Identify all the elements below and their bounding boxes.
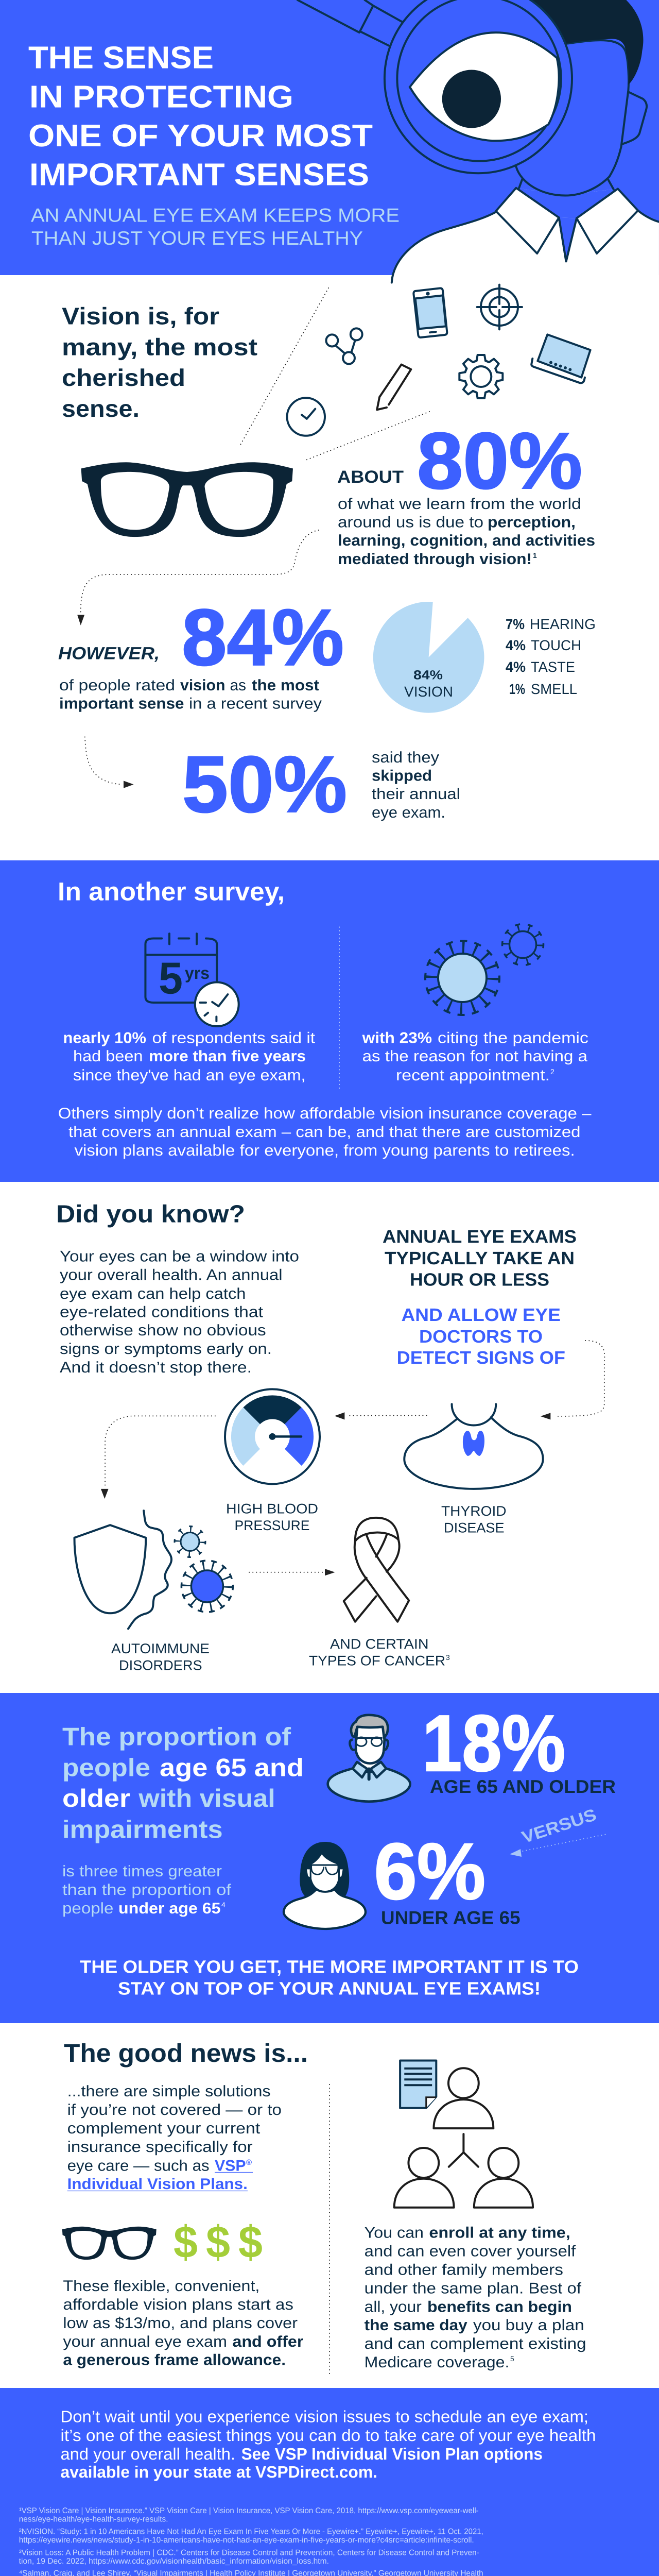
legend: other senses: TOUCH — [531, 637, 581, 653]
icon: dollar signs: $ — [174, 2216, 198, 2267]
text: call to action: it’s one of the easiest things you can do to take care of your eye health — [61, 2426, 596, 2445]
subtitle: THAN JUST YOUR EYES HEALTHY — [31, 227, 363, 249]
stat: 50% skipped: their annual — [372, 786, 460, 803]
icon: gear — [459, 355, 502, 398]
heading: proportion of people age 65 and older: people — [62, 1754, 150, 1782]
pie chart: most important sense: VISION — [404, 684, 453, 700]
text: simple solutions — [67, 2083, 282, 2193]
callout: annual eye exams: ANNUAL EYE EXAMS — [383, 1227, 577, 1247]
text: simple solutions: Individual Vision Plans. — [67, 2176, 248, 2193]
heading: proportion of people age 65 and older: The proportion of — [62, 1723, 291, 1751]
stat: 50% skipped: eye exam. — [372, 804, 445, 821]
footnotes: ness/eye-health/eye-health-survey-results. — [19, 2515, 168, 2523]
stat: about 80% — [337, 416, 595, 568]
text: enroll at any time — [365, 2225, 586, 2371]
text: enroll at any time: under the same plan. Best of — [365, 2280, 582, 2297]
panel: another survey — [0, 860, 659, 1182]
text: three times greater: is three times greater — [62, 1863, 222, 1880]
icon: shield and viruses — [74, 1511, 233, 1629]
heading: vision is cherished: cherished — [62, 364, 185, 391]
footnotes — [19, 2506, 487, 2576]
label: under age 65: UNDER AGE 65 — [381, 1907, 521, 1928]
text: flexible plans: your annual eye exam — [63, 2333, 227, 2350]
text: with 23%: 2 — [550, 1067, 554, 1076]
text: 84% description: as — [230, 677, 246, 694]
text: enroll at any time: 5 — [510, 2354, 514, 2363]
footnotes: ³Vision Loss: A Public Health Problem | CDC.” Centers for Disease Control and Prevention, Centers for Disease Control and Preven- — [19, 2548, 479, 2557]
icon: blood pressure gauge — [225, 1389, 320, 1484]
text: enroll at any time: You can — [365, 2225, 424, 2242]
text: flexible plans: a generous frame allowance. — [63, 2352, 286, 2369]
text: 84% description: of people rated — [59, 677, 175, 694]
text: simple solutions: if you’re not covered — or to — [67, 2102, 282, 2119]
icon: cancer ribbon — [344, 1518, 409, 1622]
text: 84% description: in a recent survey — [189, 696, 322, 713]
panel: vision statistics — [58, 285, 596, 829]
text: eyes window into health: otherwise show no obvious — [60, 1322, 266, 1339]
text: enroll at any time: and can complement existing — [365, 2335, 586, 2352]
heading: proportion of people age 65 and older: older — [62, 1785, 130, 1812]
heading: the good news: The good news is... — [64, 2039, 308, 2067]
text: 80% description: perception, — [488, 514, 576, 531]
text: 80% description: mediated through vision! — [338, 551, 532, 568]
text: eyes window into health: your overall health. An annual — [60, 1267, 283, 1284]
label: certain types of cancer: AND CERTAIN — [330, 1636, 429, 1652]
heading: did you know: Did you know? — [56, 1201, 245, 1228]
text: with 23% — [362, 1029, 588, 1084]
icon: small virus — [502, 924, 544, 965]
label: certain types of cancer: TYPES OF CANCER — [309, 1653, 445, 1669]
text: others simply don't realize: that covers an annual exam – can be, and that there are customized — [68, 1124, 581, 1141]
text: simple solutions: complement your current — [67, 2120, 261, 2137]
callout: versus arrow: VERSUS — [519, 1805, 599, 1847]
stat: 50% skipped — [182, 740, 460, 829]
stat: 50% skipped: skipped — [372, 768, 432, 784]
title: ONE OF YOUR MOST — [28, 118, 373, 153]
subtitle: AN ANNUAL EYE EXAM KEEPS MORE — [31, 205, 400, 226]
panel: did you know — [56, 1201, 604, 1673]
legend: other senses: 4% — [506, 637, 526, 653]
icon: dollar signs — [174, 2216, 263, 2267]
label: thyroid disease: DISEASE — [444, 1520, 505, 1535]
text: three times greater: people — [62, 1900, 113, 1917]
icon: clock check — [287, 398, 325, 436]
stat: about 80%: 80% — [417, 416, 582, 505]
text: eyes window into health: Your eyes can be a window into — [60, 1248, 299, 1265]
legend: other senses: SMELL — [531, 681, 577, 697]
panel: age comparison — [0, 1693, 659, 2023]
icon: thyroid — [404, 1404, 543, 1489]
stat: however 84% — [58, 593, 344, 713]
text: nearly 10%: had been — [73, 1048, 143, 1065]
text: eyes window into health: signs or symptoms early on. — [60, 1341, 272, 1358]
icon: calendar 5 yrs — [145, 934, 239, 1026]
text: eyes window into health: eye-related conditions that — [60, 1303, 264, 1321]
text: enroll at any time: all, your — [365, 2298, 422, 2315]
callout: the older you get — [80, 1957, 579, 1999]
panel: call to action and footnotes — [0, 2388, 659, 2576]
legend: other senses: 4% — [506, 659, 526, 675]
text: 84% description: important sense — [59, 696, 184, 713]
icon: older man — [328, 1715, 410, 1802]
text: three times greater: 4 — [221, 1901, 226, 1909]
text: three times greater — [62, 1863, 232, 1917]
arrows: dotted flow between conditions — [101, 1341, 604, 1575]
pie chart: most important sense: 84% — [413, 668, 443, 682]
label: autoimmune disorders: AUTOIMMUNE — [111, 1641, 210, 1656]
heading: proportion of people age 65 and older: age 65 and — [160, 1754, 304, 1782]
icon: pencil — [377, 365, 411, 410]
callout: annual eye exams — [383, 1227, 577, 1368]
text: nearly 10%: more than five years — [149, 1048, 306, 1065]
title: IMPORTANT SENSES — [29, 157, 369, 192]
text: 80% description — [338, 496, 595, 568]
text: with 23%: with 23% — [362, 1029, 432, 1046]
icon: nodes, pencil and clock — [287, 328, 411, 436]
text: nearly 10%: nearly 10% — [63, 1029, 146, 1046]
title: IN PROTECTING — [29, 79, 293, 114]
icon: glasses small — [62, 2227, 157, 2260]
text: flexible plans: These flexible, convenient, — [63, 2278, 259, 2295]
text: with 23%: citing the pandemic — [438, 1029, 588, 1046]
legend: other senses: 7% — [506, 616, 525, 632]
icon: calendar 5 yrs: yrs — [185, 963, 210, 982]
text: three times greater: under age 65 — [118, 1900, 221, 1917]
callout: annual eye exams: HOUR OR LESS — [410, 1270, 549, 1290]
icon: dollar signs: $ — [206, 2216, 230, 2267]
icon: family plan — [394, 2060, 533, 2208]
text: eyes window into health: eye exam can help catch — [60, 1285, 246, 1302]
legend: other senses: HEARING — [530, 616, 596, 632]
stat: however 84%: 84% — [182, 593, 344, 682]
heading: vision is cherished — [62, 303, 257, 422]
text: eyes window into health: And it doesn’t stop there. — [60, 1359, 252, 1376]
text: enroll at any time: and other family members — [365, 2262, 563, 2278]
text: simple solutions: ® — [246, 2158, 252, 2167]
text: 84% description — [59, 677, 322, 713]
label: high blood pressure — [226, 1501, 318, 1533]
dotted rays from glasses — [240, 288, 429, 460]
stat: about 80%: ABOUT — [337, 467, 404, 487]
callout: versus arrow — [510, 1805, 605, 1857]
text: others simply don't realize: vision plans available for everyone, from young parents to retirees. — [74, 1142, 575, 1159]
icon: younger woman — [284, 1842, 366, 1929]
legend: other senses: TASTE — [531, 659, 575, 675]
text: call to action — [61, 2408, 596, 2481]
callout: the older you get: THE OLDER YOU GET, THE MORE IMPORTANT IT IS TO — [80, 1957, 579, 1977]
label: autoimmune disorders: DISORDERS — [119, 1658, 202, 1673]
label: certain types of cancer: 3 — [446, 1653, 450, 1662]
label: autoimmune disorders — [111, 1641, 210, 1673]
stat: 6%: 6% — [374, 1827, 485, 1916]
heading: proportion of people age 65 and older: with visual — [138, 1785, 275, 1812]
text: 80% description: learning, cognition, and activities — [338, 532, 595, 549]
text: enroll at any time: and can even cover yourself — [365, 2243, 576, 2260]
footnotes: https://eyewire.news/news/study-1-in-10-americans-have-not-had-an-eye-exam-in-five-years-or-more?c4src=article:infinite-scroll. — [19, 2536, 474, 2545]
text: 84% description: vision — [180, 677, 226, 694]
label: high blood pressure: HIGH BLOOD — [226, 1501, 318, 1517]
icon: laptop — [531, 334, 591, 383]
text: with 23%: as the reason for not having a — [362, 1048, 587, 1065]
icon: calendar 5 yrs: 5 — [159, 953, 183, 1004]
callout: annual eye exams: AND ALLOW EYE — [402, 1305, 561, 1325]
label: certain types of cancer — [309, 1636, 450, 1669]
stat: 18%: 18% — [422, 1699, 565, 1788]
text: three times greater: than the proportion of — [62, 1882, 232, 1899]
panel: hero header — [0, 0, 659, 283]
text: flexible plans — [63, 2278, 304, 2369]
text: enroll at any time: benefits can begin — [427, 2298, 572, 2315]
text: eyes window into health — [60, 1248, 299, 1376]
footnotes: ²NVISION. “Study: 1 in 10 Americans Have Not Had An Eye Exam In Five Years Or More - Eyewire+.” Eyewire+, Eyewire+, 11 Oct. 2021, — [19, 2528, 483, 2536]
heading: in another survey: In another survey, — [58, 877, 285, 906]
text: flexible plans: and offer — [232, 2333, 304, 2350]
callout: annual eye exams: DETECT SIGNS OF — [397, 1348, 565, 1368]
callout: the older you get: STAY ON TOP OF YOUR ANNUAL EYE EXAMS! — [118, 1979, 541, 1999]
icon: target — [477, 285, 522, 329]
text: 80% description: of what we learn from the world — [338, 496, 581, 513]
text: simple solutions: eye care — such as — [67, 2157, 210, 2174]
heading: vision is cherished: many, the most — [62, 334, 257, 361]
icon: dollar signs: $ — [238, 2216, 263, 2267]
illustration: man looking through magnifying glass — [298, 0, 659, 283]
text: call to action: available in your state at VSPDirect.com. — [61, 2463, 377, 2481]
text: call to action: See VSP Individual Vision Plan options — [241, 2445, 543, 2463]
text: flexible plans: affordable vision plans start as — [63, 2296, 293, 2313]
label: high blood pressure: PRESSURE — [235, 1518, 310, 1533]
text: enroll at any time: enroll at any time, — [429, 2225, 570, 2242]
arrow: dotted to 50% — [85, 737, 134, 788]
text: simple solutions: insurance specifically for — [67, 2139, 253, 2156]
pie chart: most important sense — [373, 602, 484, 713]
stat: 50% skipped: 50% — [182, 740, 347, 829]
icon: connected nodes — [326, 328, 362, 364]
legend: other senses: 1% — [509, 681, 525, 697]
text: nearly 10% — [63, 1029, 316, 1084]
callout: annual eye exams: TYPICALLY TAKE AN — [385, 1248, 575, 1268]
arrow: dotted to however — [77, 530, 319, 625]
heading: vision is cherished: Vision is, for — [62, 303, 219, 330]
footnotes: ¹VSP Vision Care | Vision Insurance.” VSP Vision Care | Vision Insurance, VSP Vision Care, 2018, https://www.vsp.com/eyewear-well- — [19, 2506, 479, 2515]
text: enroll at any time: Medicare coverage. — [365, 2354, 509, 2371]
heading: proportion of people age 65 and older — [62, 1723, 304, 1843]
heading: proportion of people age 65 and older: impairments — [62, 1816, 223, 1843]
title — [28, 40, 373, 192]
icon: smartphone — [413, 288, 447, 337]
legend: other senses — [506, 616, 596, 697]
text: call to action: and your overall health. — [61, 2445, 235, 2463]
text: nearly 10%: of respondents said it — [152, 1029, 316, 1046]
text: simple solutions: VSP — [215, 2157, 246, 2174]
text: simple solutions: ...there are simple solutions — [67, 2083, 271, 2100]
text: enroll at any time: the same day — [365, 2317, 467, 2334]
text: call to action: Don’t wait until you experience vision issues to schedule an eye exam; — [61, 2408, 588, 2426]
stat: however 84%: HOWEVER, — [58, 644, 160, 664]
stat: 50% skipped: said they — [372, 749, 439, 766]
text: enroll at any time: you buy a plan — [473, 2317, 584, 2334]
title: THE SENSE — [28, 40, 214, 75]
icon: virus particles — [425, 924, 544, 1015]
text: 84% description: the most — [252, 677, 319, 694]
text: others simply don't realize — [58, 1105, 592, 1159]
panel: the good news — [62, 2039, 586, 2374]
callout: annual eye exams: DOCTORS TO — [419, 1327, 543, 1347]
heading: vision is cherished: sense. — [62, 395, 140, 422]
text: 80% description: 1 — [533, 551, 537, 560]
footnotes: tion, 19 Dec. 2022, https://www.cdc.gov/visionhealth/basic_information/vision_loss.htm. — [19, 2557, 329, 2566]
icon: blue virus — [181, 1561, 233, 1612]
label: thyroid disease: THYROID — [441, 1503, 507, 1519]
subtitle — [31, 205, 400, 249]
label: age 65 and older: AGE 65 AND OLDER — [430, 1776, 616, 1797]
text: 80% description: around us is due to — [338, 514, 483, 531]
icon: large virus — [425, 941, 499, 1015]
text: others simply don't realize: Others simply don’t realize how affordable vision insurance coverage – — [58, 1105, 592, 1122]
text: flexible plans: low as $13/mo, and plans cover — [63, 2315, 298, 2332]
text: nearly 10%: since they've had an eye exam, — [73, 1067, 306, 1084]
icon: large glasses — [81, 462, 293, 537]
icon: small light virus — [175, 1526, 205, 1557]
label: thyroid disease — [441, 1503, 507, 1535]
text: with 23%: recent appointment. — [396, 1067, 550, 1084]
